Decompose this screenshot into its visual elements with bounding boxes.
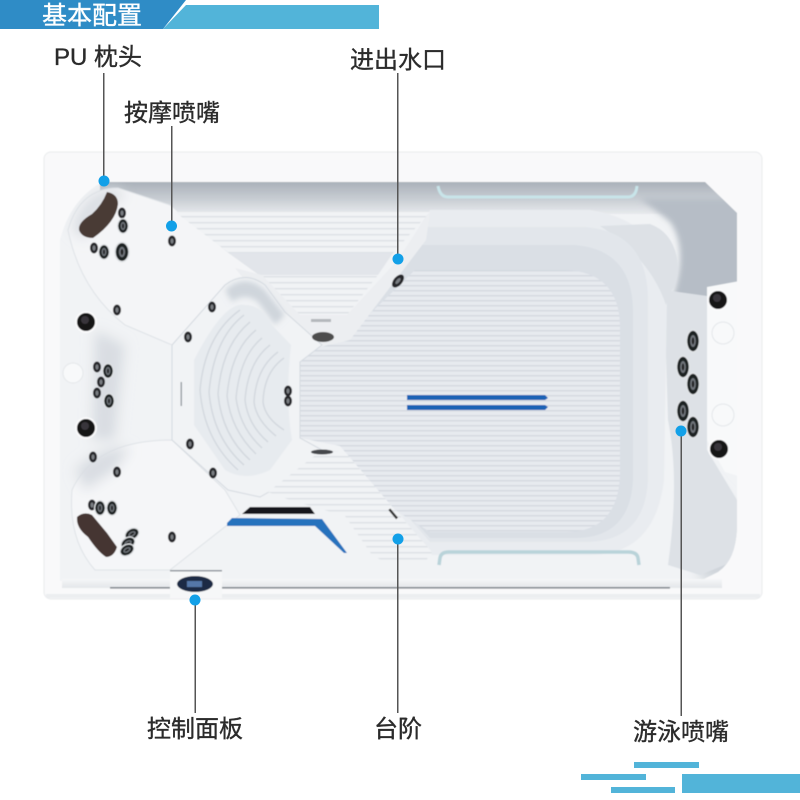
label: massage jets bbox=[124, 100, 220, 232]
tub interior bbox=[62, 182, 738, 579]
label: swim jets bbox=[633, 426, 729, 746]
black wedge bbox=[242, 507, 315, 514]
swim step 3 bbox=[345, 245, 633, 538]
right seat bbox=[600, 224, 678, 305]
right deck bbox=[706, 281, 738, 308]
step center band bbox=[229, 253, 393, 275]
footwell ribs bbox=[200, 310, 284, 470]
footer bars bbox=[581, 762, 800, 793]
bottom lip bbox=[62, 579, 722, 588]
left seat shading bbox=[72, 188, 130, 490]
top ledge bbox=[100, 182, 740, 214]
right wall shading bbox=[644, 198, 738, 296]
label: massage jets: 按摩喷嘴 bbox=[124, 100, 220, 127]
bottom handrail bbox=[439, 552, 639, 565]
step top stripes bbox=[175, 212, 430, 253]
label: swim jets: 游泳喷嘴 bbox=[633, 719, 729, 746]
swim jets bbox=[676, 329, 700, 439]
footwell bbox=[172, 278, 322, 497]
massage jets bbox=[88, 208, 406, 559]
label: PU headrest bbox=[54, 44, 142, 186]
outer rim bbox=[44, 152, 762, 599]
label: step bbox=[374, 534, 422, 743]
left seats bbox=[68, 187, 176, 344]
label: step: 台阶 bbox=[374, 716, 422, 743]
label: PU headrest: PU 枕头 bbox=[54, 44, 142, 71]
label: water inlet: 进出水口 bbox=[350, 47, 446, 74]
step center stripes bbox=[264, 276, 376, 314]
top handrail bbox=[438, 186, 637, 197]
spa tub bbox=[40, 152, 762, 599]
center diagonal ledge bbox=[322, 228, 427, 346]
header banner bbox=[0, 0, 379, 30]
right bench bbox=[664, 290, 737, 575]
blue chevron bbox=[227, 518, 347, 553]
swim step 2 bbox=[345, 227, 648, 542]
header title: 基本配置 bbox=[42, 2, 142, 30]
swim step 1 bbox=[665, 304, 666, 326]
headrest: top bbox=[79, 192, 118, 238]
lower step stripes bbox=[268, 450, 432, 562]
control panel bbox=[170, 570, 222, 598]
label: water inlet bbox=[350, 47, 446, 264]
label: control panel bbox=[147, 594, 243, 743]
headrest: bottom bbox=[77, 513, 117, 557]
center lines bbox=[407, 395, 548, 410]
pillow lights and fittings bbox=[63, 289, 734, 460]
swim floor stripes bbox=[300, 270, 620, 532]
label: control panel: 控制面板 bbox=[147, 716, 243, 743]
